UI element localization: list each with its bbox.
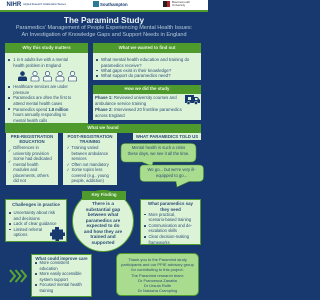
text: pre-registration findings: placements, others bbox=[13, 173, 49, 178]
text: challenges list bbox=[14, 210, 56, 237]
heading: what we found bbox=[5, 124, 201, 132]
panel: acknowledgements: Dr Natasha Crampling bbox=[138, 288, 177, 293]
logo: Bournemouth University bbox=[163, 0, 190, 7]
heading: how we did the study bbox=[93, 85, 201, 94]
text: challenges list: Uncertainty about risk bbox=[14, 210, 55, 215]
logo: University of Southampton: Southampton bbox=[100, 2, 128, 7]
text: 1 in 5 adults bbox=[13, 57, 68, 68]
text: 1 in 5 adults: health problem in England bbox=[13, 63, 61, 68]
text: healthcare bullets: hours annually responding to bbox=[13, 112, 66, 117]
heading: post-registration training: TRAINING bbox=[80, 139, 100, 144]
text: key finding: There is a bbox=[92, 201, 114, 206]
text: challenges list: and decisions bbox=[14, 216, 40, 221]
text: study phases: across England bbox=[95, 113, 125, 118]
logo: Bournemouth University: Bournemouth bbox=[172, 0, 190, 4]
text: challenges list: Limited referral bbox=[14, 227, 42, 232]
text: healthcare bullets: Healthcare services are under bbox=[13, 84, 68, 89]
quote text: mental health crisis: these days, we see it all the time. bbox=[128, 151, 189, 156]
quote text: ill-equipped bbox=[148, 167, 196, 178]
heading: what paramedics told us bbox=[133, 133, 201, 140]
text: post-registration findings bbox=[72, 145, 109, 183]
panel: post-registration training bbox=[63, 132, 117, 185]
panel: what we wanted to find out bbox=[93, 43, 201, 80]
icon: ticks: ✓ bbox=[66, 145, 70, 150]
text: study phases: Phase 2: Interviewed 20 frontline paramedics bbox=[95, 107, 182, 112]
text: 1 in 5 adults: 1 in 5 adults live with a mental bbox=[13, 57, 68, 62]
heading: pre-registration education: PRE-REGISTRATION bbox=[11, 134, 53, 138]
heading: pre-registration education bbox=[11, 134, 53, 144]
header logo bar bbox=[0, 0, 208, 12]
heading: what we found: What we found bbox=[87, 125, 119, 130]
heading: what could improve care: What could improve care bbox=[35, 256, 88, 260]
heading: how we did the study: How we did the study bbox=[125, 86, 169, 91]
heading: challenges in practice: Challenges in practice bbox=[12, 202, 60, 206]
text: key finding: expected to do bbox=[86, 223, 120, 228]
icon row: one in five people bbox=[18, 71, 77, 82]
heading: what we wanted to find out: What we wanted to find out bbox=[119, 45, 175, 50]
text: post-registration findings: services bbox=[72, 156, 87, 161]
text: pre-registration findings: mental health bbox=[13, 162, 38, 167]
text: key finding bbox=[84, 201, 122, 245]
heading: key finding: Key Finding bbox=[91, 192, 117, 197]
text: pre-registration findings: Some had dedicated bbox=[13, 156, 52, 161]
text: pre-registration findings: modules and bbox=[13, 167, 37, 172]
text: key finding: trained and bbox=[90, 234, 116, 239]
text: paramedic needs: Clear decision-making bbox=[148, 234, 189, 239]
text: healthcare bullets: Paramedics are often the first to bbox=[13, 95, 71, 100]
text: post-registration findings: between ambulance bbox=[72, 151, 108, 156]
text: paramedic needs: escalation skills bbox=[148, 228, 177, 233]
text: post-registration findings: Training varied bbox=[72, 145, 98, 150]
subtitle: An Investigation of Knowledge Gaps and Support Needs in England bbox=[21, 32, 187, 38]
panel: acknowledgements: Dr Ursula Rolfe bbox=[144, 283, 171, 288]
text: pre-registration findings: Differences in bbox=[13, 145, 39, 150]
text: key finding: substantial gap bbox=[86, 207, 120, 212]
text: paramedic needs bbox=[148, 212, 192, 245]
text: post-registration findings: Often not mandatory bbox=[72, 162, 109, 167]
text: pre-registration findings bbox=[13, 145, 52, 183]
text: challenges list: Lack of clear guidance bbox=[14, 221, 56, 226]
icon: ticks bbox=[8, 148, 11, 164]
quote bubble: ill-equipped bbox=[140, 164, 204, 188]
text: post-registration findings: covered (e.g., young bbox=[72, 173, 109, 178]
heading: post-registration training: POST-REGISTRATION bbox=[67, 134, 113, 138]
text: research questions: What mental health education and training do bbox=[101, 57, 189, 62]
logo: University of Southampton bbox=[93, 1, 128, 7]
text: research questions: paramedics receive? bbox=[101, 63, 142, 68]
text: improvements list: system support bbox=[40, 277, 68, 282]
logo: Bournemouth University: University bbox=[172, 3, 185, 7]
heading: pre-registration education: EDUCATION bbox=[19, 139, 45, 144]
text: healthcare bullets: pressure bbox=[13, 90, 29, 95]
key finding circle bbox=[72, 190, 134, 252]
text: study phases bbox=[95, 95, 182, 118]
text: post-registration findings: people, addiction) bbox=[72, 178, 104, 183]
heading: what paramedics say they need: they need bbox=[160, 207, 181, 212]
text: healthcare bullets: attend mental health cases bbox=[13, 101, 62, 106]
quote text: ill-equipped: We go... but we're very ill- bbox=[148, 167, 195, 172]
text: study phases: ambulance service training bbox=[95, 101, 146, 106]
subtitle bbox=[16, 25, 192, 38]
text: research questions bbox=[101, 57, 190, 78]
quote text: mental health crisis bbox=[128, 145, 189, 156]
text: healthcare bullets: Paramedics spend 1.8 million bbox=[13, 107, 68, 112]
panel: acknowledgements: The Paramind research team: bbox=[131, 273, 184, 278]
text: paramedic needs: scenario-based training bbox=[148, 217, 191, 222]
text: improvements list: education bbox=[40, 266, 58, 271]
text: healthcare bullets: mental health calls bbox=[13, 118, 47, 123]
icon: ticks: ✓ bbox=[8, 148, 11, 153]
text: key finding: and how they are bbox=[84, 229, 122, 234]
text: improvements list: More easily accessible bbox=[40, 271, 82, 276]
panel: acknowledgements: participants and our PPIE advisory group bbox=[121, 262, 194, 267]
text: pre-registration findings: university provision bbox=[13, 151, 49, 156]
quote bubble: mental health crisis bbox=[120, 143, 196, 165]
heading: why this study matters: Why this study matters bbox=[22, 45, 71, 50]
heading: what paramedics say they need bbox=[148, 201, 193, 212]
panel: acknowledgements: for contributing to this project. bbox=[131, 267, 184, 272]
text: research questions: What support do paramedics need? bbox=[101, 73, 171, 78]
icon: puzzle piece bbox=[50, 227, 65, 241]
heading: what we wanted to find out bbox=[93, 43, 201, 53]
heading: post-registration training bbox=[67, 134, 113, 144]
panel: acknowledgements: Thank you to the Paramind study bbox=[128, 257, 187, 262]
text: challenges list: options bbox=[14, 232, 27, 237]
text: key finding: paramedics are bbox=[86, 218, 120, 223]
text: research questions: What gaps exist in their knowledge? bbox=[101, 68, 171, 73]
icon: ambulance bbox=[185, 95, 200, 105]
text: improvements list: Focused mental health bbox=[40, 282, 82, 287]
icon: chevrons bbox=[9, 270, 27, 282]
text: key finding: between what bbox=[88, 212, 118, 217]
text: paramedic needs: More practical, bbox=[148, 212, 175, 217]
text: pre-registration findings: did not bbox=[13, 178, 26, 183]
text: post-registration findings: Some topics less bbox=[72, 167, 102, 172]
panel: how we did the study bbox=[93, 85, 201, 120]
heading: key finding bbox=[82, 191, 126, 200]
panel: acknowledgements: Dr Francesca Zanatta bbox=[138, 278, 177, 283]
heading: what paramedics told us: WHAT PARAMEDICS TOLD US bbox=[136, 134, 198, 139]
subtitle: Paramedics' Management of People Experiencing Mental Health Issues: bbox=[16, 25, 192, 31]
icon: ticks: ✓ bbox=[66, 167, 70, 172]
text: improvements list: More consistent bbox=[40, 260, 69, 265]
icon: ticks: ✓ bbox=[8, 159, 11, 164]
panel: pre-registration education bbox=[6, 132, 58, 185]
text: key finding: supported bbox=[92, 240, 114, 245]
panel: acknowledgements bbox=[116, 253, 199, 296]
panel: what paramedics say they need bbox=[140, 199, 201, 245]
quote text: ill-equipped: equipped to go... bbox=[156, 173, 187, 178]
text: improvements list: training bbox=[40, 288, 53, 293]
title: The Paramind Study bbox=[64, 15, 144, 25]
heading: what paramedics say they need: What paramedics say bbox=[148, 201, 193, 206]
panel: challenges in practice bbox=[5, 199, 67, 242]
panel: what could improve care bbox=[31, 254, 92, 297]
text: paramedic needs: Communication and de- bbox=[148, 223, 192, 228]
icon: ticks: ✓ bbox=[66, 162, 70, 167]
heading: why this study matters bbox=[5, 43, 88, 53]
quote text: mental health crisis: Mental health is such a crisis bbox=[132, 145, 185, 150]
logo: NIHR: NIHR Applied Research Collaboration Wessex bbox=[6, 2, 66, 8]
text: healthcare bullets bbox=[13, 84, 72, 123]
panel: why this study matters bbox=[5, 43, 88, 124]
text: paramedic needs: frameworks bbox=[148, 240, 170, 245]
text: study phases: Phase 1: Reviewed university courses and bbox=[95, 95, 177, 100]
icon: ticks bbox=[66, 145, 70, 172]
text: improvements list bbox=[40, 260, 82, 293]
